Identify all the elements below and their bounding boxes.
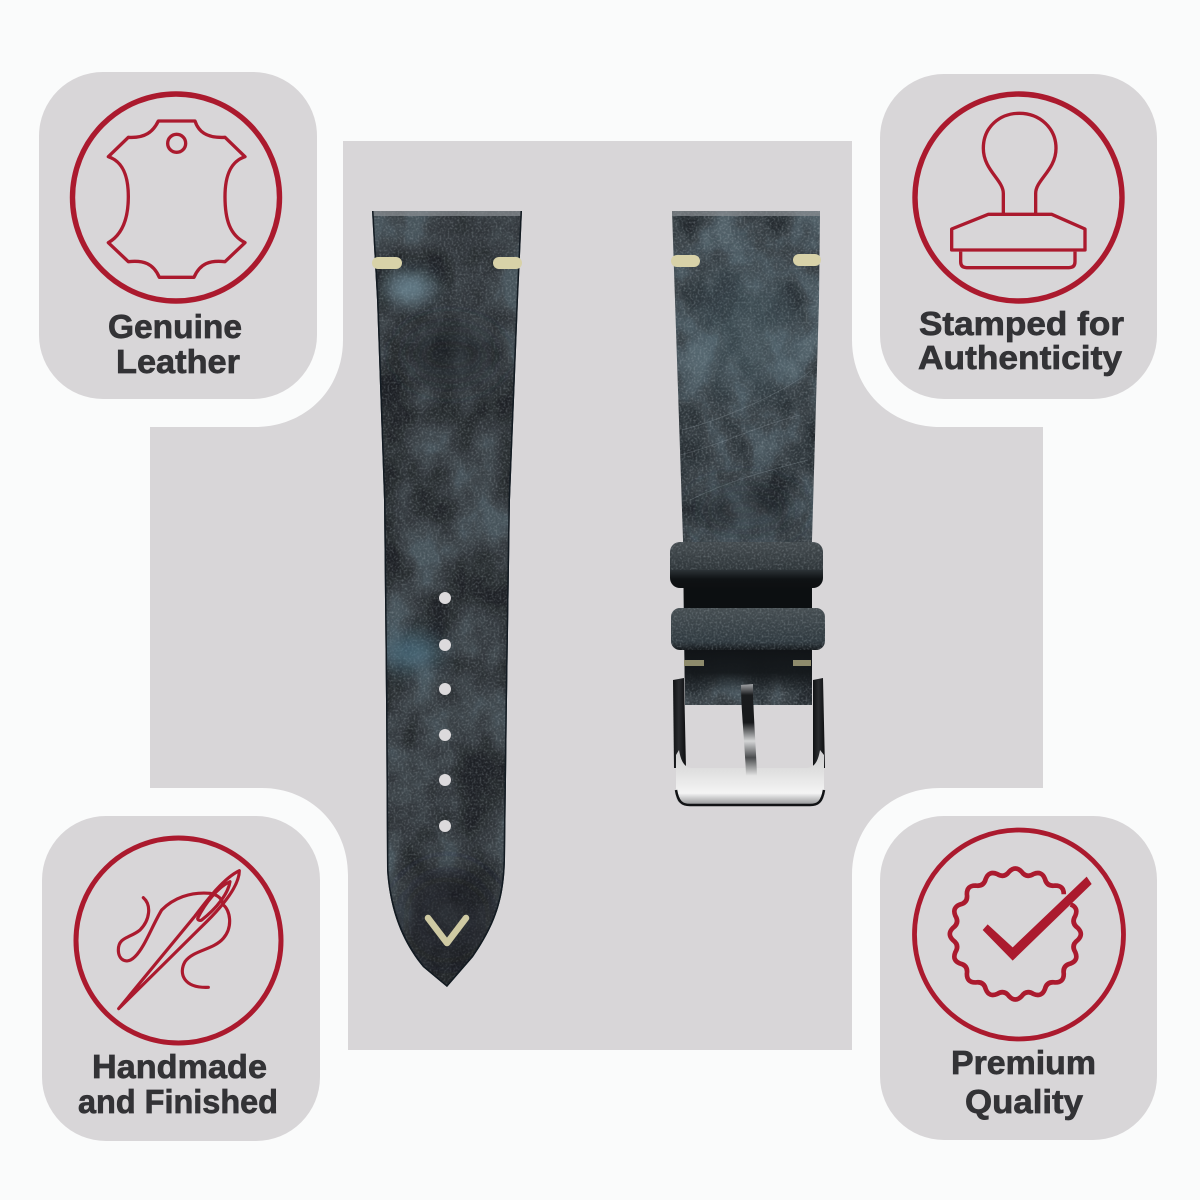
lower stitches near buckle [684, 660, 811, 666]
icon: needle and thread in circle [76, 838, 281, 1043]
watch strap buckle piece [665, 205, 830, 805]
panel: Premium Quality [880, 816, 1157, 1140]
watch strap long piece with holes and stitching [372, 211, 522, 987]
icon: check mark badge in circle [914, 830, 1124, 1039]
label: Premium Quality: Premium [951, 1044, 1096, 1081]
label: Stamped for Authenticity: Stamped for [919, 305, 1124, 342]
buckle frame and tongue [673, 678, 825, 805]
panel: Handmade and Finished [42, 816, 320, 1141]
label: Handmade and Finished: Handmade [92, 1048, 267, 1085]
label: Handmade and Finished: and Finished [78, 1083, 278, 1120]
stitch: left strap upper left [378, 257, 396, 269]
stitches: buckle piece [677, 260, 815, 261]
central cross-shaped backdrop panel [150, 141, 1043, 1050]
label: Premium Quality: Quality [965, 1083, 1084, 1120]
strap keeper lower [671, 608, 825, 650]
label: Genuine Leather: Leather [116, 343, 240, 380]
V stitch at strap tip [428, 918, 466, 943]
panel: Genuine Leather [39, 72, 317, 399]
icon: stamp in circle [915, 94, 1122, 301]
stitch: left strap upper right [499, 257, 516, 269]
label: Genuine Leather: Genuine [108, 308, 242, 345]
strap keeper upper [670, 542, 823, 588]
icon: leather hide in circle [72, 94, 280, 301]
strap adjustment holes [439, 592, 451, 832]
label: Stamped for Authenticity: Authenticity [918, 339, 1123, 376]
panel: Stamped for Authenticity [880, 74, 1157, 399]
